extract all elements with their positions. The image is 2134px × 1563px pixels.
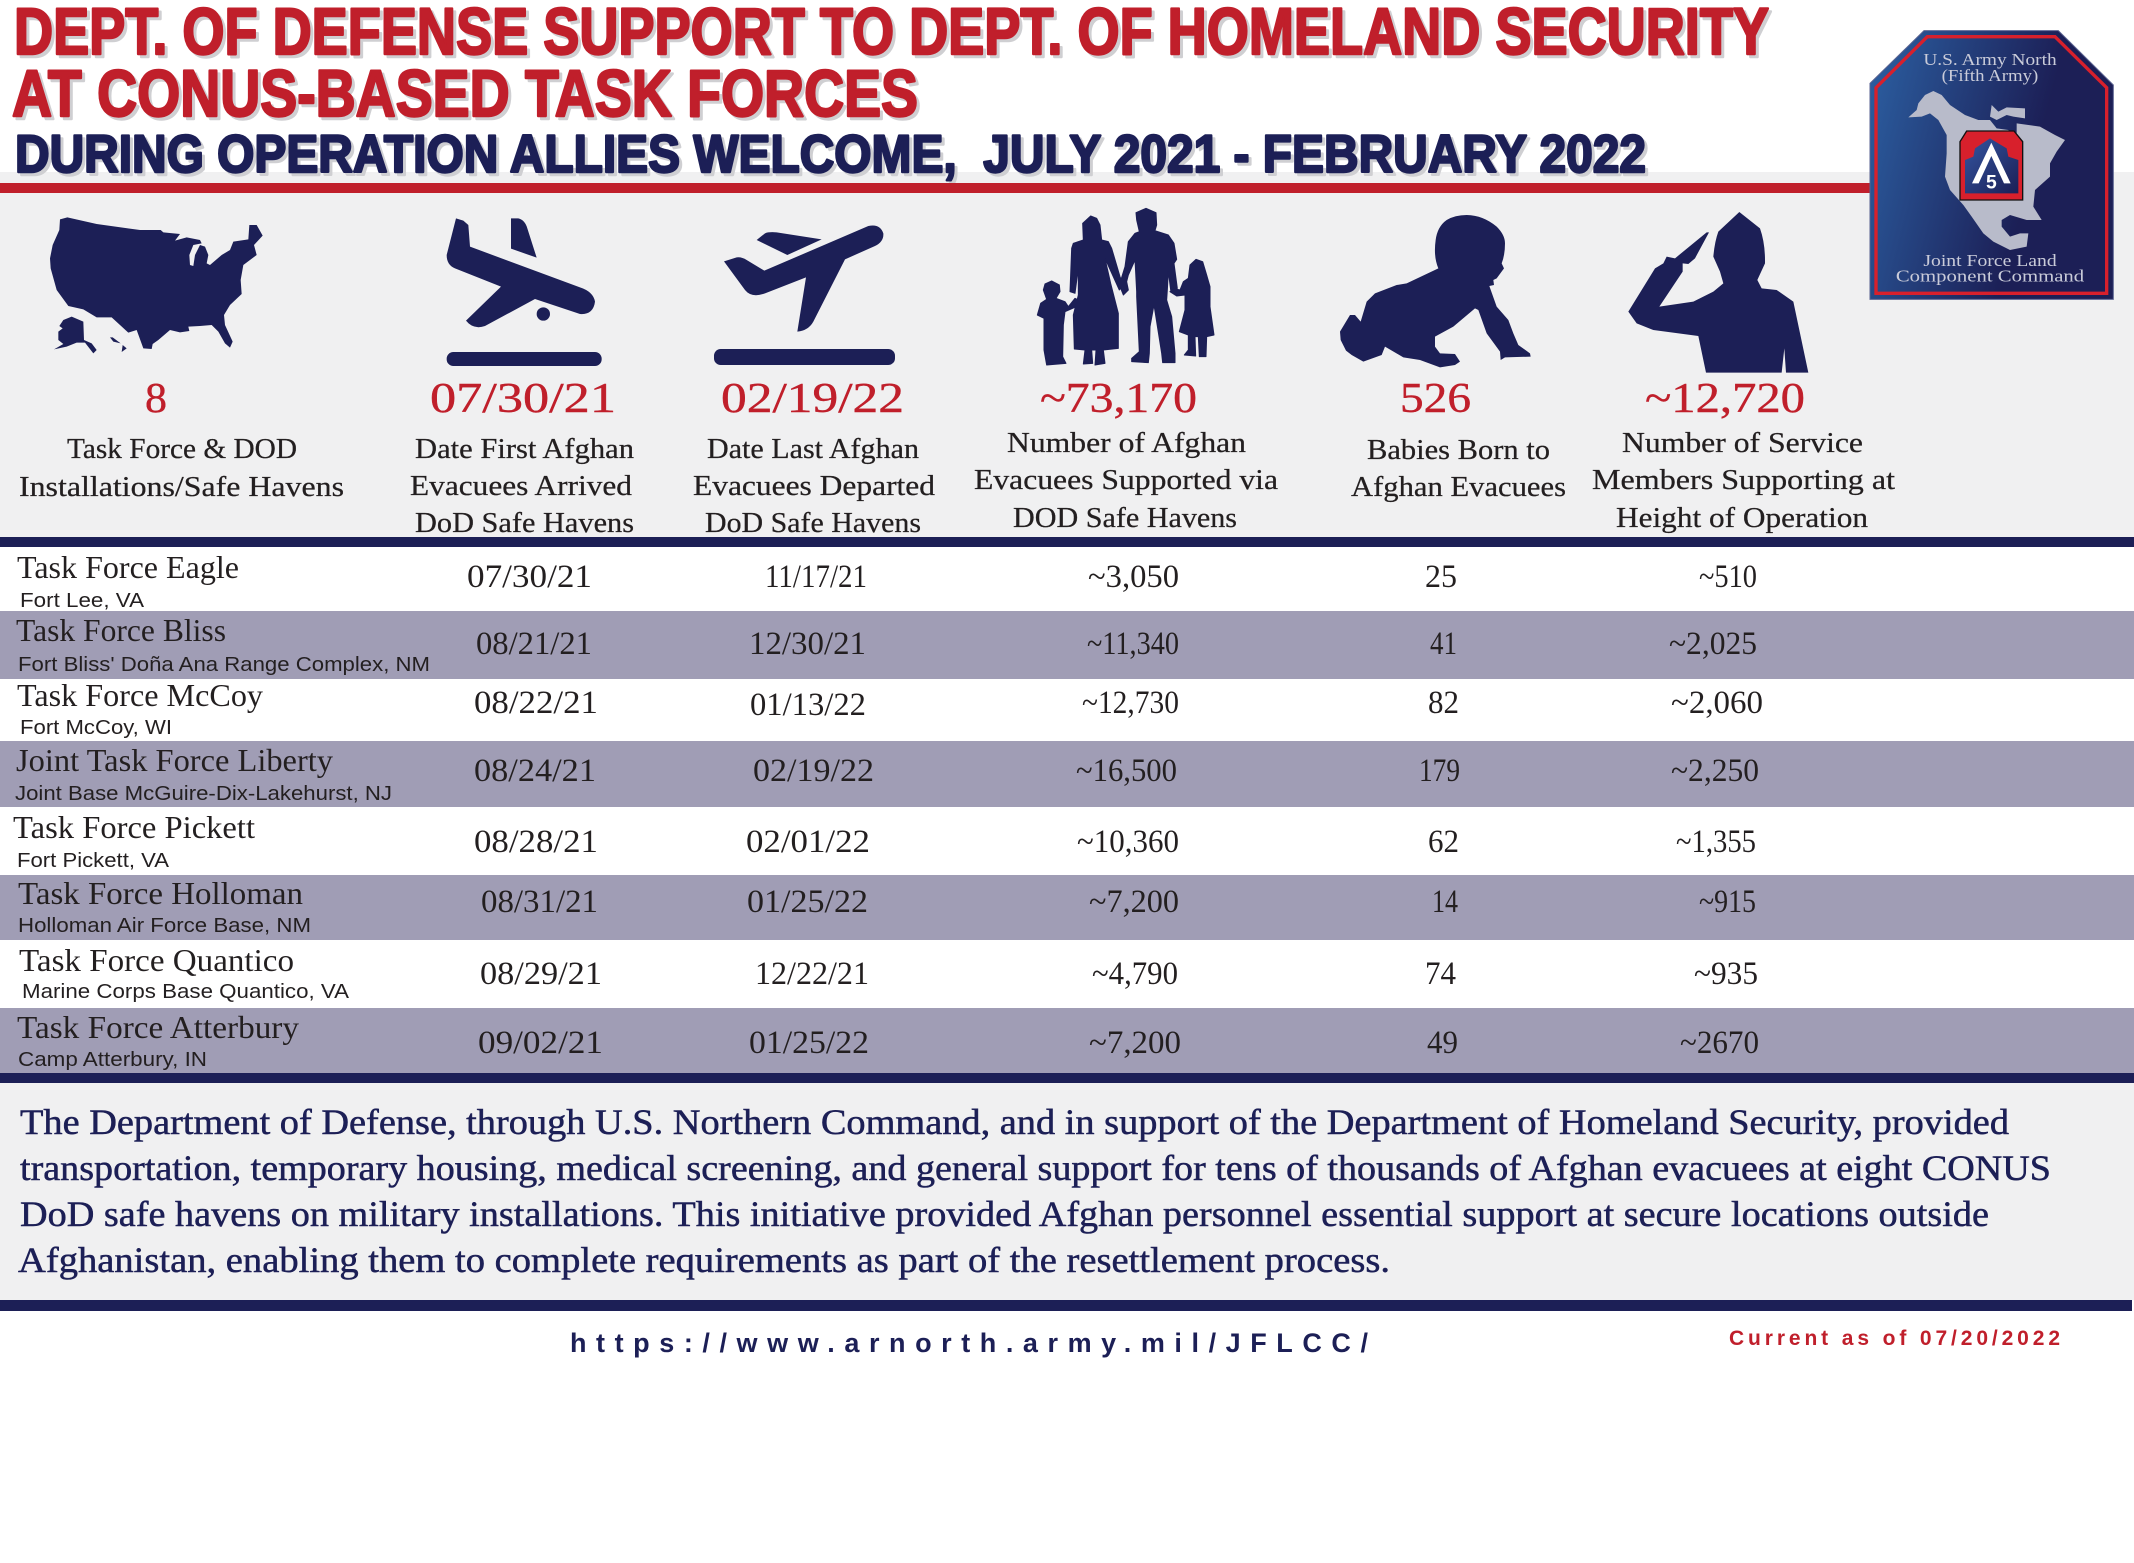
table row: Task Force Holloman: ~915 xyxy=(1699,884,1756,920)
table row: Task Force Quantico: ~4,790 xyxy=(1092,956,1178,992)
icon: saluting service member xyxy=(1628,212,1808,373)
table row: Task Force Pickett: 02/01/22 xyxy=(746,824,870,860)
stat: evacuees supported: Number of Afghan xyxy=(1007,428,1246,459)
table row: Task Force Atterbury: ~7,200 xyxy=(1089,1025,1181,1061)
table row: Task Force Atterbury: Camp Atterbury, IN xyxy=(18,1048,207,1071)
stat: last departure date xyxy=(693,376,935,539)
table row: Task Force Bliss: 08/21/21 xyxy=(476,626,592,662)
table row: Task Force Atterbury: ~2670 xyxy=(1680,1025,1759,1061)
table row: Task Force Bliss: 12/30/21 xyxy=(749,626,866,662)
footer url: https://www.arnorth.army.mil/JFLCC/ xyxy=(570,1328,1368,1358)
stat: babies born xyxy=(1351,376,1566,503)
icon: map of the United States xyxy=(50,217,263,353)
stat: babies born: Afghan Evacuees xyxy=(1351,472,1566,503)
table row: Task Force Eagle: 07/30/21 xyxy=(467,559,592,595)
table row: Joint Task Force Liberty: 08/24/21 xyxy=(474,753,596,789)
table row: Task Force Pickett: Task Force Pickett xyxy=(13,809,255,845)
table row: Task Force Eagle: Fort Lee, VA xyxy=(20,589,144,612)
table row: Task Force Atterbury xyxy=(0,1008,2134,1073)
table top rule xyxy=(0,537,2134,547)
table row: Task Force Pickett: 08/28/21 xyxy=(474,824,598,860)
title xyxy=(12,0,1769,184)
table row: Task Force Eagle: ~510 xyxy=(1699,559,1757,595)
badge: U.S. Army North JFLCC logo: Joint Force Land xyxy=(1923,251,2057,270)
table row: Task Force McCoy xyxy=(0,677,2134,741)
stat: evacuees supported: ~73,170 xyxy=(1040,376,1197,422)
table row: Task Force Quantico: 74 xyxy=(1425,956,1456,992)
stat: first arrival date xyxy=(410,376,634,539)
table row: Task Force Bliss: ~11,340 xyxy=(1087,626,1179,662)
icon: plane taking off xyxy=(714,225,895,365)
table row: Task Force Atterbury: 09/02/21 xyxy=(478,1025,603,1061)
table row: Task Force Bliss: Task Force Bliss xyxy=(16,612,226,648)
table row: Task Force Pickett: 62 xyxy=(1428,824,1459,860)
table row: Task Force Holloman: 14 xyxy=(1432,884,1458,920)
table row: Task Force McCoy: Task Force McCoy xyxy=(17,677,263,713)
table row: Task Force Pickett: Fort Pickett, VA xyxy=(17,849,169,872)
table row: Task Force Eagle xyxy=(0,547,2134,612)
table row: Task Force Pickett: ~10,360 xyxy=(1077,824,1179,860)
table row: Task Force Eagle: 25 xyxy=(1425,559,1457,595)
summary paragraph: DoD safe havens on military installations. This initiative provided Afghan personnel essential support at secure locations outside xyxy=(20,1194,1989,1234)
stat: evacuees supported: Evacuees Supported via xyxy=(974,465,1278,496)
table row: Task Force Atterbury: Task Force Atterbury xyxy=(17,1009,299,1045)
table row: Task Force Holloman: 08/31/21 xyxy=(481,884,598,920)
table row: Task Force Quantico: 08/29/21 xyxy=(480,956,602,992)
stat: task force installations: 8 xyxy=(145,376,167,422)
table row: Task Force Eagle: 11/17/21 xyxy=(765,559,867,595)
badge: U.S. Army North JFLCC logo: (Fifth Army) xyxy=(1942,66,2038,85)
table row: Task Force McCoy: Fort McCoy, WI xyxy=(20,716,172,739)
table row: Task Force Holloman xyxy=(0,875,2134,940)
summary paragraph xyxy=(18,1102,2051,1280)
stat: service members: ~12,720 xyxy=(1645,376,1805,422)
stat: task force installations: Task Force & DOD xyxy=(67,434,297,465)
badge: U.S. Army North JFLCC logo: Component Command xyxy=(1896,267,2085,286)
stat: first arrival date: Evacuees Arrived xyxy=(410,471,632,502)
title: AT CONUS-BASED TASK FORCES xyxy=(12,56,918,130)
icon: crawling baby xyxy=(1340,215,1531,367)
badge: U.S. Army North JFLCC logo: 5 xyxy=(1986,172,1997,193)
stat: babies born: 526 xyxy=(1400,376,1471,422)
table row: Task Force Eagle: Task Force Eagle xyxy=(17,549,239,585)
table row: Task Force Quantico: Task Force Quantico xyxy=(19,942,294,978)
table row: Task Force Bliss: ~2,025 xyxy=(1669,626,1757,662)
table row: Joint Task Force Liberty: ~16,500 xyxy=(1076,753,1177,789)
table row: Task Force Quantico: ~935 xyxy=(1694,956,1758,992)
table row: Task Force Quantico: Marine Corps Base Quantico, VA xyxy=(22,980,349,1003)
stat: first arrival date: Date First Afghan xyxy=(415,434,634,465)
stat: task force installations xyxy=(19,376,344,503)
table row: Task Force McCoy: 82 xyxy=(1428,685,1459,721)
table row: Task Force Bliss xyxy=(0,611,2134,679)
table row: Task Force Holloman: Task Force Holloman xyxy=(18,875,303,911)
table row: Joint Task Force Liberty: Joint Base McGuire-Dix-Lakehurst, NJ xyxy=(15,782,392,805)
table row: Task Force McCoy: 01/13/22 xyxy=(750,687,866,723)
table row: Task Force McCoy: ~2,060 xyxy=(1671,685,1763,721)
table row: Joint Task Force Liberty: ~2,250 xyxy=(1671,753,1759,789)
stat: babies born: Babies Born to xyxy=(1367,435,1550,466)
table row: Task Force Atterbury: 49 xyxy=(1427,1025,1458,1061)
stat: evacuees supported: DOD Safe Havens xyxy=(1013,503,1237,534)
stat: service members xyxy=(1592,376,1895,534)
table row: Joint Task Force Liberty: 02/19/22 xyxy=(753,753,874,789)
table row: Task Force Bliss: Fort Bliss' Doña Ana Range Complex, NM xyxy=(18,653,430,676)
stat: first arrival date: DoD Safe Havens xyxy=(415,508,634,539)
table row: Joint Task Force Liberty: Joint Task Force Liberty xyxy=(16,742,333,778)
stat: service members: Members Supporting at xyxy=(1592,465,1895,496)
table row: Task Force Quantico xyxy=(0,940,2134,1008)
table bottom rule xyxy=(0,1073,2134,1083)
stat: task force installations: Installations/Safe Havens xyxy=(19,472,344,503)
table row: Task Force McCoy: 08/22/21 xyxy=(474,685,598,721)
table row: Task Force Pickett xyxy=(0,807,2134,875)
table row: Task Force McCoy: ~12,730 xyxy=(1082,685,1179,721)
stat: last departure date: Evacuees Departed xyxy=(693,471,935,502)
summary paragraph: The Department of Defense, through U.S. Northern Command, and in support of the Department of Homeland Security, provided xyxy=(20,1102,2009,1142)
table row: Task Force Holloman: Holloman Air Force Base, NM xyxy=(18,914,311,937)
badge: U.S. Army North JFLCC logo: U.S. Army North xyxy=(1923,50,2057,69)
table row: Joint Task Force Liberty: 179 xyxy=(1419,753,1460,789)
table row: Task Force Bliss: 41 xyxy=(1430,626,1457,662)
stat: service members: Height of Operation xyxy=(1616,503,1868,534)
badge: U.S. Army North JFLCC logo xyxy=(1870,31,2113,299)
table row: Task Force Quantico: 12/22/21 xyxy=(755,956,869,992)
table row: Task Force Holloman: 01/25/22 xyxy=(747,884,868,920)
table row: Task Force Atterbury: 01/25/22 xyxy=(749,1025,869,1061)
footer rule xyxy=(0,1300,2132,1311)
stat: last departure date: DoD Safe Havens xyxy=(705,508,921,539)
currency date note: Current as of 07/20/2022 xyxy=(1729,1327,2060,1350)
icon: family silhouette xyxy=(1037,208,1214,365)
stat: last departure date: Date Last Afghan xyxy=(707,434,919,465)
table row: Task Force Pickett: ~1,355 xyxy=(1676,824,1756,860)
stat: service members: Number of Service xyxy=(1622,428,1863,459)
stat: evacuees supported xyxy=(974,376,1278,534)
table row: Joint Task Force Liberty xyxy=(0,741,2134,807)
red header rule xyxy=(0,183,1872,193)
summary paragraph: transportation, temporary housing, medical screening, and general support for tens of thousands of Afghan evacuees at eight CONUS xyxy=(20,1148,2051,1188)
title: DURING OPERATION ALLIES WELCOME, JULY 2021 - FEBRUARY 2022 xyxy=(15,125,1646,184)
table row: Task Force Eagle: ~3,050 xyxy=(1088,559,1179,595)
summary paragraph: Afghanistan, enabling them to complete requirements as part of the resettlement process. xyxy=(18,1240,1390,1280)
icon: plane landing xyxy=(447,218,602,366)
table row: Task Force Holloman: ~7,200 xyxy=(1089,884,1179,920)
stat: last departure date: 02/19/22 xyxy=(721,376,904,422)
stat: first arrival date: 07/30/21 xyxy=(430,376,616,422)
